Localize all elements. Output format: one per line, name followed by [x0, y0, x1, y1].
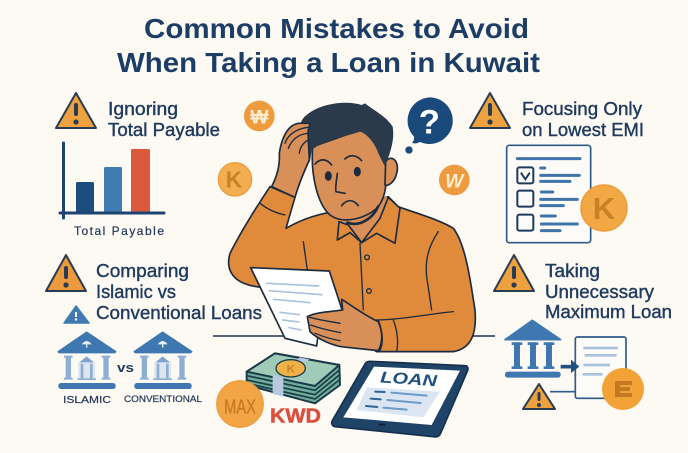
heading: comparing loans: Islamic vs [96, 282, 176, 302]
conventional label: CONVENTIONAL [124, 394, 202, 405]
icon: small blue warning [64, 306, 89, 323]
icon: warning triangle [56, 93, 96, 128]
heading: comparing loans: Conventional Loans [96, 303, 262, 323]
collar [337, 197, 400, 243]
icon: max coin: MAX [224, 395, 256, 418]
icon: conventional bank [134, 332, 192, 389]
heading: ignoring total payable: Total Payable [108, 120, 220, 140]
icon: warning triangle [494, 255, 534, 291]
heading: focusing only on lowest emi: on Lowest EMI [522, 120, 644, 140]
heading: taking unnecessary maximum loan: Unnecessary [545, 282, 654, 302]
icon: max coin [217, 381, 263, 427]
heading: ignoring total payable [108, 99, 220, 140]
vs label: vs [117, 360, 134, 375]
heading: taking unnecessary maximum loan: Maximum Loan [545, 302, 672, 322]
heading: focusing only on lowest emi: Focusing Only [522, 99, 642, 119]
kwd label: KWD [270, 405, 321, 428]
icon: question bubble: ? [419, 103, 440, 141]
icon: won coin [244, 101, 275, 131]
paper lines [267, 283, 322, 330]
islamic label: ISLAMIC [63, 395, 111, 406]
icon: w coin [439, 165, 470, 195]
icon: checklist [507, 145, 591, 243]
panel: focusing only on lowest emi [470, 93, 644, 243]
chart label: Total Payable [74, 224, 164, 238]
heading: focusing only on lowest emi [522, 99, 644, 140]
icon: warning triangle [470, 93, 510, 128]
title [117, 13, 540, 78]
face features [315, 156, 362, 206]
raised hand [272, 123, 310, 197]
title: When Taking a Loan in Kuwait [117, 47, 540, 78]
heading: comparing loans [96, 261, 262, 323]
icon: won coin: ₩ [250, 107, 269, 128]
illustration: worried man [218, 97, 475, 352]
bar chart [60, 143, 164, 218]
heading: comparing loans: Comparing [96, 261, 189, 281]
icon: loan tablet [332, 361, 468, 437]
neck [340, 197, 390, 243]
icon: k coin [218, 163, 252, 196]
icon: w coin: W [445, 171, 465, 192]
icon: k coin [581, 185, 627, 231]
paper [251, 268, 343, 346]
finger lines [285, 127, 308, 153]
icon: bank to document [505, 320, 626, 398]
icon: warning triangle [46, 255, 86, 291]
panel: ignoring total payable [56, 93, 220, 238]
icon: small warning [523, 384, 555, 409]
title: Common Mistakes to Avoid [144, 13, 529, 44]
icon: loan tablet: LOAN [380, 369, 438, 390]
heading: taking unnecessary maximum loan: Taking [545, 261, 600, 281]
heading: ignoring total payable: Ignoring [108, 99, 178, 119]
heading: taking unnecessary maximum loan [545, 261, 672, 322]
icon: islamic bank [58, 332, 116, 389]
ear [385, 158, 397, 185]
icon: k coin: K [593, 191, 616, 226]
shirt details [260, 203, 453, 352]
icon: cash stack: K [287, 363, 296, 375]
icon: question bubble [405, 97, 453, 154]
money and tablet group [217, 353, 468, 437]
table line [213, 335, 495, 337]
hair [298, 103, 393, 167]
icon: k coin: K [226, 166, 243, 192]
holding hand [307, 299, 382, 351]
hand lines [309, 317, 341, 341]
shirt [229, 187, 475, 352]
panel: taking unnecessary maximum loan [494, 255, 672, 410]
panel: comparing islamic vs conventional [46, 255, 262, 406]
head [312, 130, 386, 220]
neck shadow [347, 207, 378, 224]
icon: cash stack [247, 353, 340, 403]
icon: e coin [602, 368, 644, 410]
